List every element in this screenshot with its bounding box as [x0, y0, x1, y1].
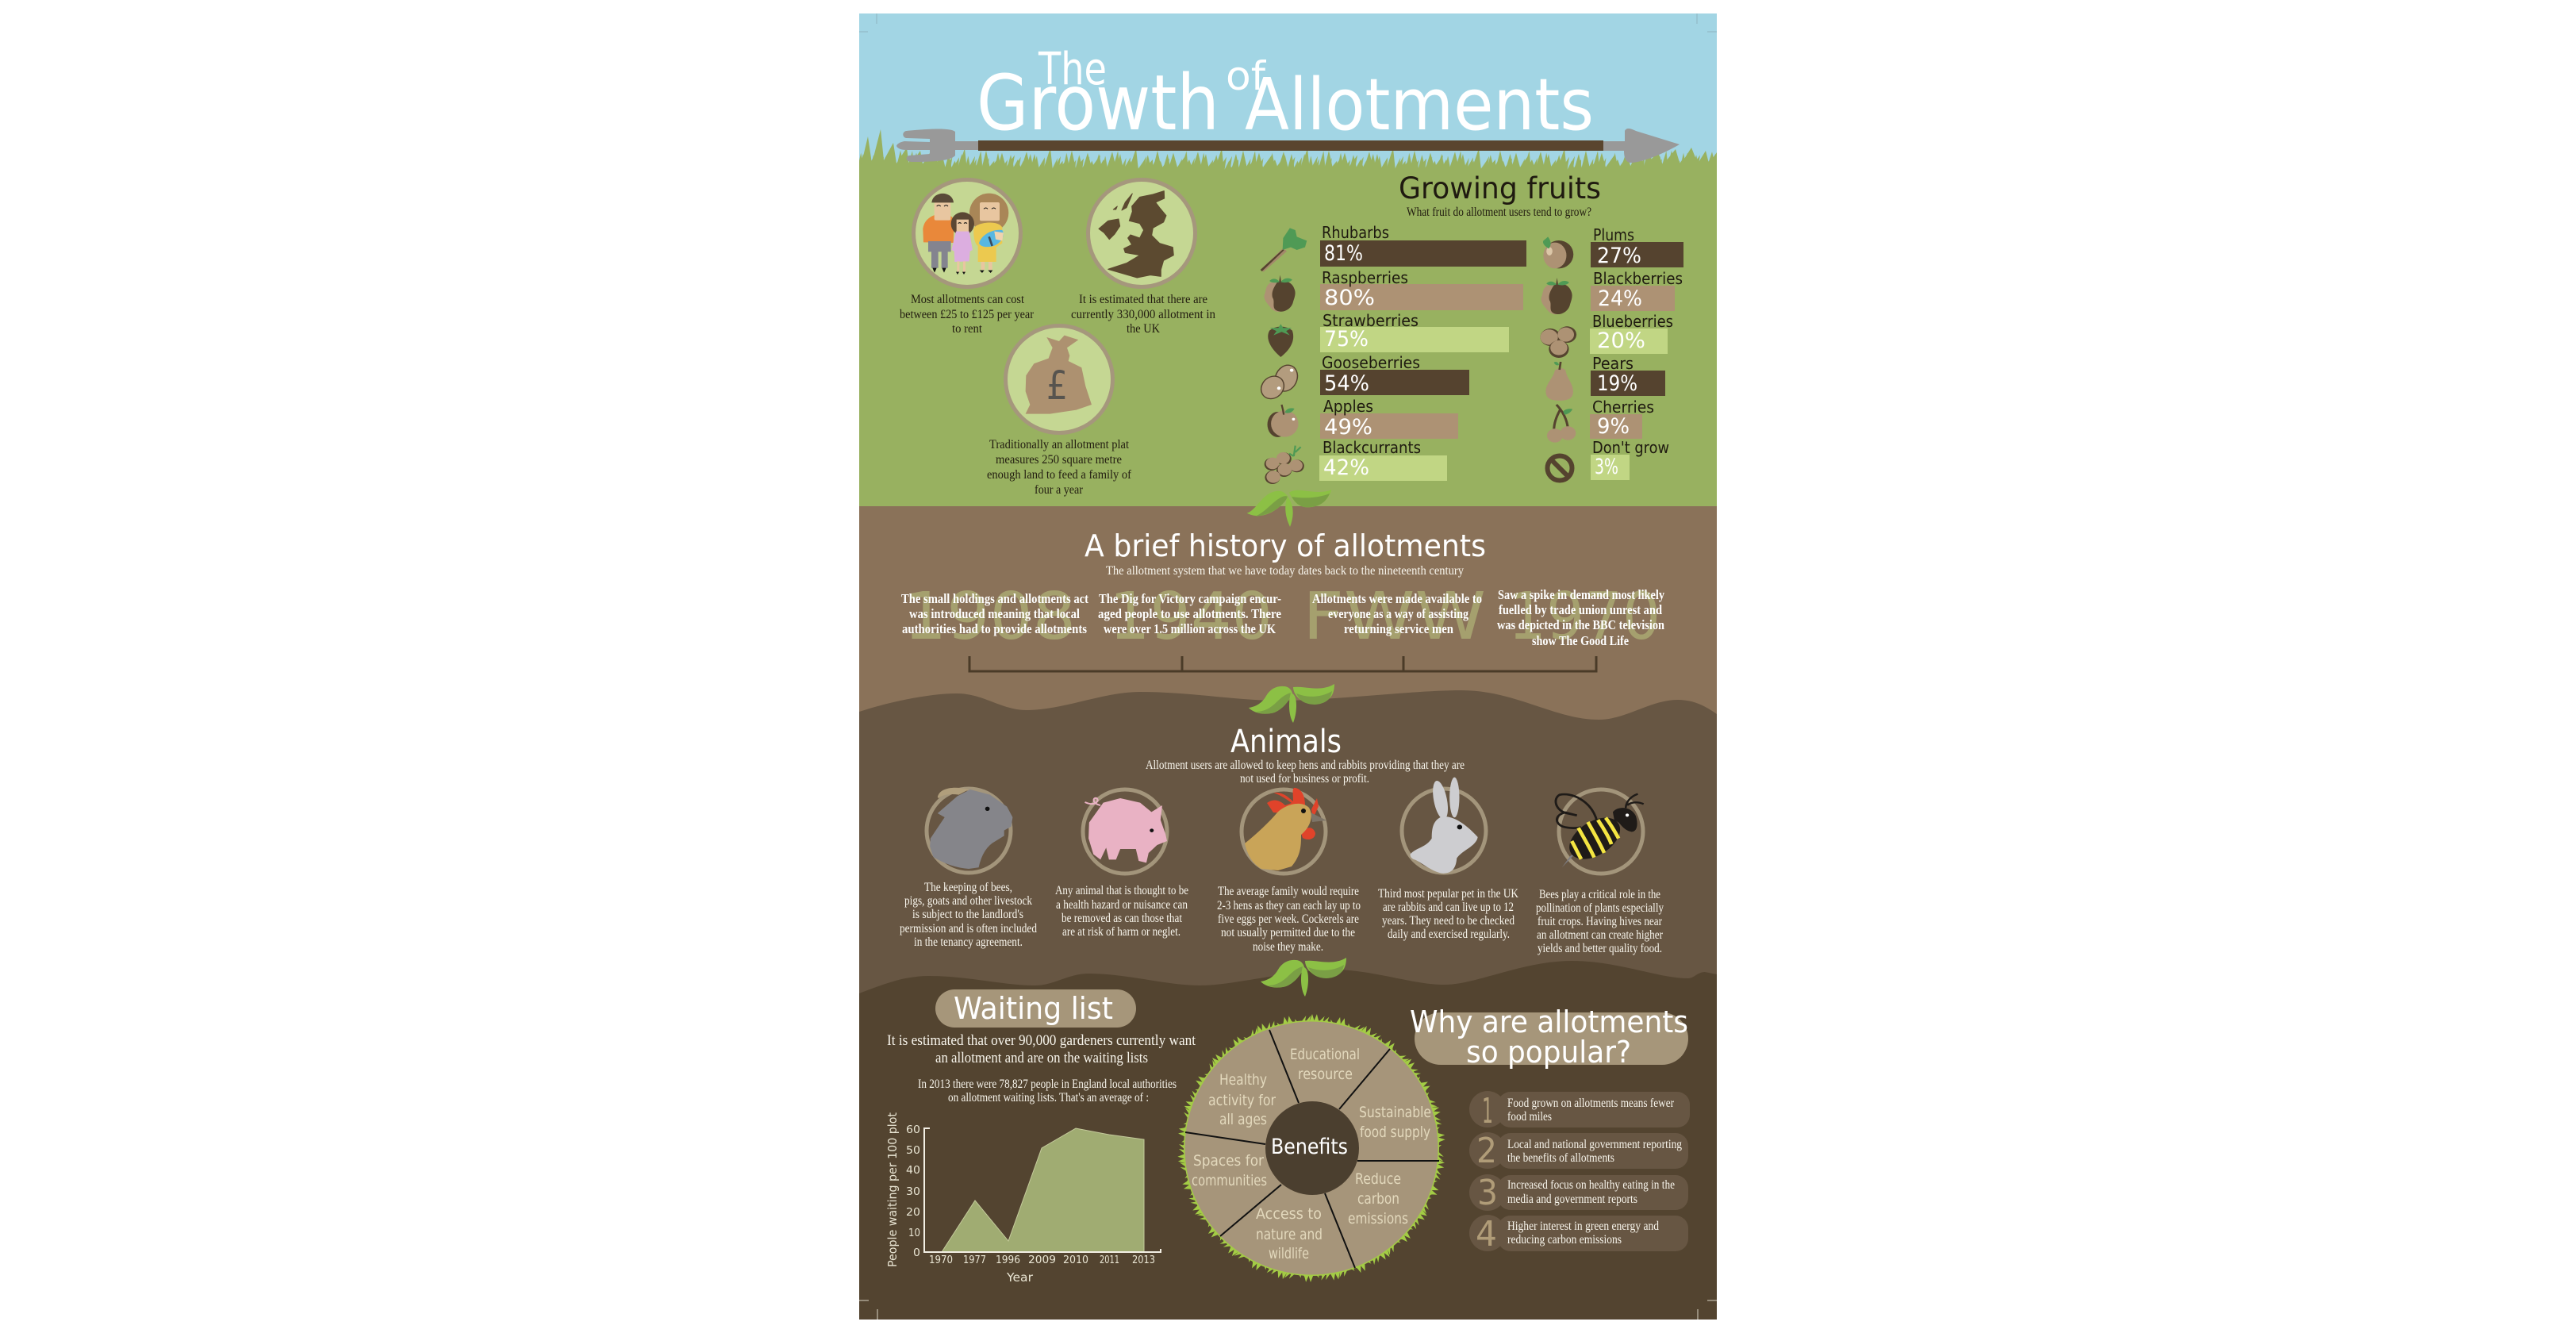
icon: money bag: £ — [1046, 363, 1068, 409]
chart: fruit bars left column: Strawberries — [1323, 311, 1419, 330]
icons: fruits — [1257, 228, 1576, 484]
chart: fruit bars right column — [1590, 225, 1683, 480]
chart: fruit bars right column: 9% — [1597, 414, 1630, 439]
text: waiting list intro: In 2013 there were 78,827 people in England local authorities — [918, 1078, 1177, 1091]
chart: people waiting per 100 plots: 1970 — [929, 1254, 953, 1266]
panel: chicken — [1217, 788, 1361, 954]
caption: number of allotments: the UK — [1127, 322, 1160, 336]
icon: garden fork and spade tool — [896, 129, 1680, 163]
chart: benefits wheel: nature and — [1256, 1226, 1323, 1243]
timeline text: 1908: authorities had to provide allotments — [902, 621, 1087, 636]
chart: fruit bars right column: 19% — [1597, 371, 1637, 396]
timeline text: FWW: returning service men — [1344, 621, 1453, 636]
panel: goat — [900, 788, 1037, 949]
chart: people waiting per 100 plots: 30 — [906, 1186, 920, 1198]
chart: fruit bars right column: Blueberries — [1592, 312, 1673, 331]
list item 2: the benefits of allotments — [1507, 1151, 1614, 1165]
panel: plot size fact — [987, 325, 1132, 497]
chart: fruit bars left column: 54% — [1324, 371, 1369, 396]
timeline bracket — [969, 656, 1596, 671]
icon: rabbit — [1411, 778, 1478, 874]
timeline text: 1940: aged people to use allotments. There — [1098, 606, 1281, 621]
chart: fruit bars right column: 27% — [1597, 244, 1641, 268]
chart: people waiting per 100 plots: 2010 — [1063, 1254, 1088, 1266]
chart: benefits wheel: food supply — [1360, 1124, 1430, 1141]
chart: benefits wheel: activity for — [1208, 1092, 1276, 1109]
background: deep soil layer — [859, 961, 1717, 1320]
background: mid soil layer — [859, 690, 1717, 1320]
icon: seedling above animals — [1249, 684, 1334, 723]
list item 2: Local and national government reporting — [1507, 1138, 1682, 1151]
caption: chicken: noise they make. — [1253, 940, 1323, 954]
caption: rental cost: Most allotments can cost — [911, 293, 1024, 306]
caption: chicken — [1217, 885, 1361, 954]
chart: people waiting per 100 plots: 60 — [906, 1124, 920, 1136]
chart: people waiting per 100 plots: 50 — [906, 1145, 920, 1157]
chart: fruit bars left column: Blackcurrants — [1323, 438, 1421, 457]
icon: bee — [1556, 794, 1644, 867]
caption: plot size — [987, 438, 1132, 497]
timeline: faded years: FWW — [1303, 579, 1486, 655]
icon: UK map — [1099, 191, 1173, 278]
heading: animals — [1146, 724, 1465, 786]
timeline text: 1970 — [1497, 587, 1664, 648]
caption: plot size: four a year — [1035, 483, 1084, 497]
chart: benefits wheel: Educational — [1290, 1046, 1360, 1063]
chart: fruit bars left column: 80% — [1324, 286, 1375, 310]
chart: fruit bars right column: Cherries — [1592, 398, 1654, 417]
timeline text: 1970: was depicted in the BBC television — [1497, 617, 1664, 632]
caption: number of allotments — [1071, 293, 1215, 336]
panel: rabbit — [1378, 778, 1518, 941]
title: The — [1038, 44, 1107, 95]
chart: fruit bars left column: 81% — [1324, 241, 1363, 266]
list item 2: 2 — [1476, 1131, 1497, 1171]
icon: gooseberries — [1257, 363, 1300, 402]
chart: benefits wheel — [1173, 1009, 1449, 1287]
panel: bee — [1536, 789, 1664, 955]
chart: people waiting per 100 plots: People waiting per 100 plot — [885, 1112, 900, 1267]
caption: number of allotments: It is estimated that there are — [1079, 293, 1207, 306]
icon: do not grow symbol — [1547, 455, 1572, 481]
title: of — [1226, 53, 1266, 99]
chart: people waiting per 100 plots: 2013 — [1132, 1254, 1155, 1266]
caption: bee: fruit crops. Having hives near — [1538, 915, 1663, 928]
text: waiting list intro: on allotment waiting lists. That's an average of : — [948, 1091, 1149, 1104]
chart: fruit bars right column: 24% — [1598, 286, 1642, 311]
caption: pig — [1055, 884, 1188, 939]
chart: fruit bars left column: Rhubarbs — [1322, 223, 1389, 242]
chart: people waiting per 100 plots: 2009 — [1028, 1254, 1056, 1266]
chart: fruit bars right column: Plums — [1593, 225, 1634, 244]
chart: fruit bars left column: 42% — [1323, 455, 1369, 480]
chart: people waiting per 100 plots — [885, 1112, 1161, 1285]
icon: rhubarb — [1261, 228, 1307, 272]
list item 3: 3 — [1477, 1173, 1498, 1213]
chart: benefits wheel: all ages — [1219, 1111, 1267, 1128]
caption: rabbit: years. They need to be checked — [1382, 914, 1515, 928]
panel: pig — [1055, 789, 1188, 939]
chart: people waiting per 100 plots: 2011 — [1100, 1254, 1119, 1266]
icon: plum — [1543, 236, 1573, 268]
icon: apple — [1268, 405, 1299, 437]
chart: fruit bars left column: 75% — [1324, 327, 1369, 351]
heading: animals: Allotment users are allowed to keep hens and rabbits providing that they are — [1146, 759, 1465, 772]
chart: people waiting per 100 plots: 40 — [906, 1165, 920, 1177]
chart: people waiting per 100 plots: 1996 — [996, 1254, 1020, 1266]
list item 1: food miles — [1507, 1110, 1552, 1124]
caption: bee: an allotment can create higher — [1537, 928, 1664, 942]
title — [977, 44, 1594, 148]
timeline text: FWW: everyone as a way of assisting — [1328, 606, 1468, 621]
chart: benefits wheel: Benefits — [1271, 1135, 1348, 1159]
chart: people waiting per 100 plots: 1977 — [963, 1254, 986, 1266]
caption: plot size: measures 250 square metre — [996, 453, 1122, 467]
timeline text: 1908: was introduced meaning that local — [909, 606, 1080, 621]
heading: brief history — [1085, 528, 1486, 578]
heading: animals: not used for business or profit. — [1240, 772, 1369, 786]
icon: family — [923, 194, 1008, 275]
icon: blueberries — [1541, 326, 1576, 358]
icon: pig — [1085, 798, 1167, 862]
icon: blackcurrants — [1265, 446, 1304, 484]
icon: seedling above waiting list — [1261, 958, 1346, 997]
caption: pig: Any animal that is thought to be — [1055, 884, 1188, 897]
heading: why are allotments so popular: Why are allotments — [1410, 1005, 1688, 1039]
chart: benefits wheel: Healthy — [1219, 1071, 1267, 1089]
chart: benefits wheel: emissions — [1348, 1210, 1408, 1227]
icon: seedling between fruit and history — [1247, 490, 1331, 527]
list item 4 — [1469, 1214, 1688, 1254]
caption: chicken: not usually permitted due to the — [1221, 926, 1355, 939]
chart: fruit bars right column: Blackberries — [1593, 269, 1683, 288]
timeline: faded years: 1940 — [1109, 579, 1273, 655]
text: waiting list intro: an allotment and are on the waiting lists — [935, 1050, 1148, 1066]
timeline text: FWW: Allotments were made available to — [1312, 591, 1482, 606]
icon: money bag — [1026, 336, 1092, 414]
list item 4: reducing carbon emissions — [1507, 1233, 1622, 1247]
chart: people waiting per 100 plots: 0 — [913, 1247, 920, 1259]
caption: pig: are at risk of harm or neglet. — [1062, 925, 1181, 939]
list item 3 — [1469, 1173, 1688, 1213]
caption: rabbit: Third most pepular pet in the UK — [1378, 887, 1518, 901]
panel: family cost fact — [900, 179, 1035, 336]
caption: goat — [900, 881, 1037, 949]
chart: benefits wheel: resource — [1298, 1066, 1353, 1083]
timeline text: 1940 — [1098, 591, 1281, 636]
text: waiting list intro — [887, 1032, 1196, 1104]
icon: raspberry — [1265, 275, 1296, 312]
list item 3: media and government reports — [1507, 1193, 1637, 1206]
timeline text: 1970: Saw a spike in demand most likely — [1498, 587, 1664, 602]
icon: cherries — [1547, 405, 1576, 443]
caption: rabbit — [1378, 887, 1518, 941]
chart: fruit bars left column — [1319, 223, 1526, 481]
heading: growing fruits: What fruit do allotment users tend to grow? — [1407, 206, 1591, 219]
grass edge — [859, 129, 1717, 176]
icon: strawberry — [1268, 324, 1293, 357]
chart: fruit bars left column: Apples — [1323, 397, 1373, 416]
caption: rabbit: are rabbits and can live up to 12 — [1383, 901, 1514, 914]
caption: bee: Bees play a critical role in the — [1539, 888, 1660, 901]
chart: people waiting per 100 plots: Year — [1006, 1270, 1034, 1285]
caption: goat: permission and is often included — [900, 922, 1037, 935]
chart: benefits wheel: wildlife — [1269, 1245, 1309, 1262]
timeline text: FWW — [1312, 591, 1482, 636]
timeline text: 1970: fuelled by trade union unrest and — [1499, 602, 1662, 617]
list item 3: Increased focus on healthy eating in the — [1507, 1178, 1675, 1192]
chart: people waiting per 100 plots: 20 — [906, 1207, 920, 1219]
timeline text: 1908 — [901, 591, 1088, 636]
heading: animals: Animals — [1230, 724, 1342, 760]
heading: why are allotments so popular: so popular? — [1466, 1035, 1631, 1070]
panel: UK allotments fact — [1071, 179, 1215, 336]
chart: fruit bars left column: Gooseberries — [1322, 353, 1420, 372]
background: sky — [859, 13, 1717, 172]
list item 2 — [1469, 1131, 1688, 1171]
timeline: faded years: 1908 — [904, 579, 1076, 655]
caption: bee — [1536, 888, 1664, 955]
chart: fruit bars right column: 20% — [1597, 328, 1645, 353]
icon: chicken — [1245, 788, 1326, 870]
icon: goat — [930, 788, 1012, 869]
text: waiting list intro: It is estimated that over 90,000 gardeners currently want — [887, 1032, 1196, 1049]
timeline text: 1970: show The Good Life — [1532, 633, 1629, 648]
background: light soil — [859, 506, 1717, 736]
timeline text: 1940: The Dig for Victory campaign encur- — [1099, 591, 1281, 606]
chart: fruit bars right column: 3% — [1595, 455, 1618, 479]
caption: bee: yields and better quality food. — [1538, 942, 1662, 955]
list item 1: Food grown on allotments means fewer — [1507, 1097, 1675, 1110]
icon: blackberry — [1541, 278, 1572, 314]
list item 1 — [1469, 1091, 1690, 1131]
caption: chicken: The average family would require — [1218, 885, 1359, 898]
caption: rental cost: to rent — [952, 322, 983, 336]
timeline text: 1940: were over 1.5 million across the UK — [1104, 621, 1276, 636]
list item 4: 4 — [1476, 1214, 1497, 1254]
caption: plot size: enough land to feed a family of — [987, 468, 1132, 482]
chart: fruit bars left column: Raspberries — [1322, 268, 1408, 287]
chart: people waiting per 100 plots: 10 — [908, 1227, 920, 1239]
heading: brief history: The allotment system that we have today dates back to the nineteenth century — [1106, 564, 1464, 578]
list item 1: 1 — [1482, 1091, 1493, 1131]
caption: plot size: Traditionally an allotment plat — [989, 438, 1129, 451]
chart: benefits wheel: Access to — [1256, 1205, 1322, 1223]
caption: goat: is subject to the landlord's — [912, 908, 1023, 921]
timeline: faded years: 1970 — [1508, 579, 1660, 655]
caption: pig: be removed as can those that — [1061, 912, 1182, 925]
caption: chicken: five eggs per week. Cockerels are — [1218, 912, 1359, 926]
background: green field — [859, 170, 1717, 506]
caption: bee: pollination of plants especially — [1536, 901, 1664, 915]
caption: rental cost — [900, 293, 1035, 336]
chart: fruit bars right column: Pears — [1592, 354, 1634, 373]
timeline: faded years — [904, 579, 1660, 655]
title: Allotments — [1245, 63, 1594, 147]
list item 4: Higher interest in green energy and — [1507, 1220, 1659, 1233]
chart: benefits wheel: Reduce — [1355, 1170, 1401, 1188]
caption: rabbit: daily and exercised regularly. — [1388, 928, 1510, 941]
chart: benefits wheel: carbon — [1357, 1190, 1399, 1208]
chart: benefits wheel: Spaces for — [1193, 1152, 1264, 1170]
caption: number of allotments: currently 330,000 allotment in — [1071, 308, 1215, 321]
heading: brief history: A brief history of allotments — [1085, 528, 1486, 563]
chart: fruit bars left column: 49% — [1324, 415, 1372, 440]
title: Growth — [977, 59, 1219, 148]
timeline text: 1908: The small holdings and allotments act — [901, 591, 1088, 606]
heading: why are allotments so popular — [1410, 1005, 1688, 1070]
chart: fruit bars right column: Don't grow — [1592, 438, 1669, 457]
caption: goat: The keeping of bees, — [924, 881, 1012, 894]
chart: benefits wheel: communities — [1192, 1172, 1267, 1189]
caption: rental cost: between £25 to £125 per year — [900, 308, 1035, 321]
caption: pig: a health hazard or nuisance can — [1056, 898, 1188, 912]
caption: goat: pigs, goats and other livestock — [904, 894, 1032, 908]
caption: chicken: 2-3 hens as they can each lay up to — [1217, 899, 1361, 912]
heading: waiting list: Waiting list — [954, 991, 1113, 1026]
caption: goat: in the tenancy agreement. — [914, 935, 1023, 949]
chart: benefits wheel: Sustainable — [1359, 1104, 1431, 1121]
icon: pear — [1545, 362, 1573, 401]
heading: growing fruits: Growing fruits — [1399, 171, 1601, 206]
